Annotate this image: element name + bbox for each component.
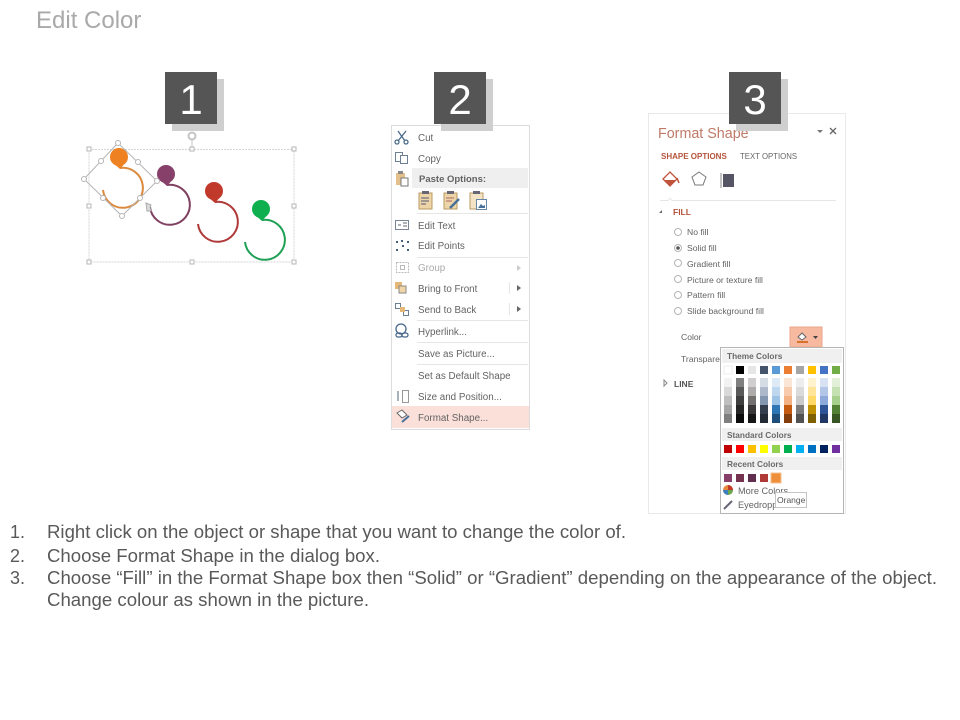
- menu labels: [418, 133, 511, 424]
- fill radio options: Gradient fill: [687, 259, 731, 269]
- color picker popup: [720, 348, 844, 514]
- step 1 text: 1.: [10, 522, 25, 542]
- fill radio options: [674, 227, 764, 316]
- menu labels: Set as Default Shape: [418, 371, 511, 382]
- step 3 text: Choose “Fill” in the Format Shape box then “Solid” or “Gradient” depending on the appearance of the object.: [47, 568, 937, 588]
- section heading: line: LINE: [674, 379, 694, 389]
- pane controls: [817, 128, 836, 134]
- step 2 text: 2.: [10, 546, 25, 566]
- step badge 3: [729, 72, 788, 131]
- pane divider: [660, 198, 836, 200]
- orange tooltip: [776, 492, 806, 508]
- icon: paste: [396, 171, 408, 186]
- fill radio options: Solid fill: [687, 243, 717, 253]
- theme color shades: [724, 378, 840, 423]
- icon: copy: [396, 152, 408, 164]
- step badge 2: [434, 72, 493, 131]
- pane background: [648, 114, 846, 514]
- fill radio options: Picture or texture fill: [687, 275, 763, 285]
- recent color swatches: [724, 473, 781, 483]
- submenu arrows: [517, 265, 521, 312]
- icon: paste option format: [444, 191, 459, 209]
- tab: shape options: SHAPE OPTIONS: [661, 152, 727, 161]
- instructions list: [10, 522, 937, 610]
- menu labels: Size and Position...: [418, 392, 502, 403]
- fill radio options: No fill: [687, 227, 709, 237]
- menu labels: Copy: [418, 154, 441, 165]
- menu dividers: [417, 214, 528, 364]
- menu labels: Paste Options:: [419, 174, 486, 185]
- fill radio options: Pattern fill: [687, 290, 725, 300]
- menu labels: Cut: [418, 133, 434, 144]
- step badge 3: 3: [743, 76, 767, 123]
- icon: orange pin: [103, 148, 143, 208]
- step 3 text: 3.: [10, 568, 25, 588]
- standard colors heading: Standard Colors: [727, 430, 792, 440]
- step 2 text: Choose Format Shape in the dialog box.: [47, 546, 380, 566]
- section heading: fill: [659, 207, 691, 217]
- color button: [790, 327, 822, 347]
- icon: bring to front: [395, 282, 406, 293]
- icon: size layout: [721, 173, 734, 188]
- recent colors heading: [722, 457, 842, 470]
- icon: edit points: [396, 240, 409, 251]
- highlight: format shape: [392, 406, 529, 428]
- step 3 text: Change colour as shown in the picture.: [47, 590, 369, 610]
- standard colors heading: [722, 428, 842, 441]
- recent colors heading: Recent Colors: [727, 459, 784, 469]
- icon: move cursor: [146, 203, 151, 211]
- menu labels: Format Shape...: [418, 413, 488, 424]
- step 1 text: Right click on the object or shape that you want to change the color of.: [47, 522, 626, 542]
- icon: pentagon: [692, 172, 706, 185]
- theme colors heading: Theme Colors: [727, 351, 783, 361]
- color label: Color: [681, 332, 702, 342]
- panel: format shape pane: [648, 114, 846, 514]
- section heading: fill: FILL: [673, 207, 691, 217]
- rotated selection diamond: [82, 140, 160, 218]
- icon: edit text: [396, 220, 408, 230]
- step 3 text: [10, 568, 937, 610]
- pane title: Format Shape: [658, 126, 749, 142]
- more colors item: [723, 485, 788, 496]
- standard color swatches: [724, 445, 840, 453]
- tab: text options: TEXT OPTIONS: [740, 152, 797, 161]
- menu labels: Group: [418, 263, 446, 274]
- icon: green pin: [245, 200, 285, 260]
- icon: group: [396, 262, 408, 272]
- section heading: line: [664, 379, 694, 389]
- icon: send to back: [396, 304, 408, 316]
- menu labels: Save as Picture...: [418, 349, 495, 360]
- menu labels: Edit Text: [418, 221, 456, 232]
- icon: paste option keep text: [419, 191, 432, 209]
- more colors item: More Colors: [738, 486, 788, 496]
- icon: hyperlink: [396, 324, 408, 337]
- title: Edit Color: [36, 7, 141, 34]
- popup background: [720, 348, 844, 514]
- menu labels: Hyperlink...: [418, 327, 467, 338]
- fill radio options: Slide background fill: [687, 306, 764, 316]
- icon: fill bucket: [663, 172, 679, 186]
- menu labels: Send to Back: [418, 305, 476, 316]
- panel: context menu: [392, 126, 530, 430]
- icon: scissors: [395, 131, 408, 144]
- eyedropper item: Eyedropper: [738, 500, 786, 510]
- menu labels: Bring to Front: [418, 284, 478, 295]
- panel: selected shapes: [82, 132, 296, 264]
- icon: size and position: [398, 390, 408, 402]
- menu labels: Edit Points: [418, 241, 465, 252]
- transparency label: Transparency: [681, 354, 734, 364]
- icon: purple pin: [150, 165, 190, 225]
- theme color swatches: [724, 366, 840, 374]
- step badge 1: 1: [179, 76, 203, 123]
- icon: format shape: [397, 410, 409, 422]
- step badge 2: 2: [448, 76, 472, 123]
- theme colors heading: [722, 349, 842, 363]
- highlight: paste options: [412, 168, 528, 188]
- selection box: [87, 132, 296, 264]
- step badge 1: [165, 72, 224, 131]
- menu background: [392, 126, 530, 430]
- icon: red pin: [198, 182, 238, 242]
- icon: paste option picture: [470, 191, 486, 210]
- orange tooltip: Orange: [777, 495, 806, 505]
